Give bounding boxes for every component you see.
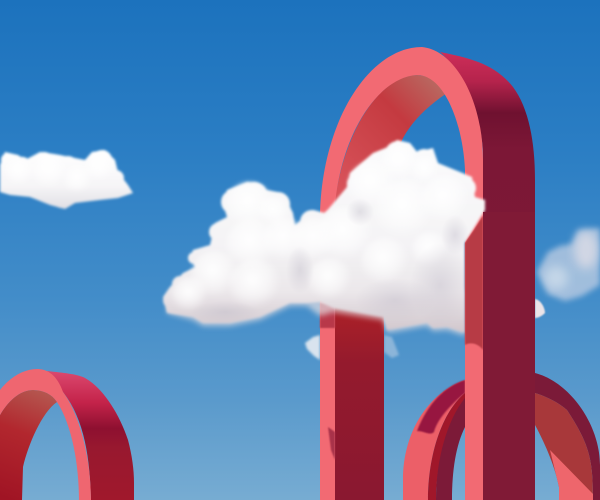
back arch left band [403, 380, 465, 500]
back arch top shadow [417, 380, 465, 434]
left cloud highlights [6, 154, 114, 194]
left cloud body with scalloped edge [0, 150, 133, 209]
large arch right pillar front, in front of cloud [465, 212, 535, 500]
back arch: lower right [403, 373, 600, 500]
small cloud wisp: right of pillar [535, 299, 545, 318]
large arch inner surface [335, 75, 447, 260]
back arch sunlit inner surface [550, 450, 593, 500]
cloud body with scalloped edge [163, 140, 485, 333]
back arch inner surface right [535, 393, 593, 500]
left pillar top shade [320, 303, 335, 328]
back arch left dark band [436, 398, 465, 500]
distant cloud: right edge [537, 228, 600, 301]
left pillar front [320, 300, 335, 500]
right pillar lit strip [465, 216, 483, 500]
left pillar dark fleck [328, 427, 335, 460]
small arch front face [0, 369, 91, 500]
cloud shaded creases [191, 198, 470, 327]
right pillar shaded strip [465, 216, 483, 350]
cloud highlights [172, 144, 469, 313]
left small arch [0, 369, 134, 500]
left cloud [0, 150, 133, 209]
left pillar side [335, 305, 384, 500]
main cloud [163, 140, 485, 336]
cloud fuzzy bottom edge [167, 290, 465, 336]
large arch: upper structure [320, 47, 535, 500]
small arch dark side [47, 371, 134, 500]
small cloud wisps below main cloud [305, 335, 399, 360]
back arch right band [535, 373, 600, 500]
large arch front face [320, 47, 483, 330]
large arch dark side [440, 52, 535, 500]
back arch left inner band [428, 393, 465, 500]
right pillar dark side [483, 212, 535, 500]
small arch inner surface [0, 390, 57, 500]
